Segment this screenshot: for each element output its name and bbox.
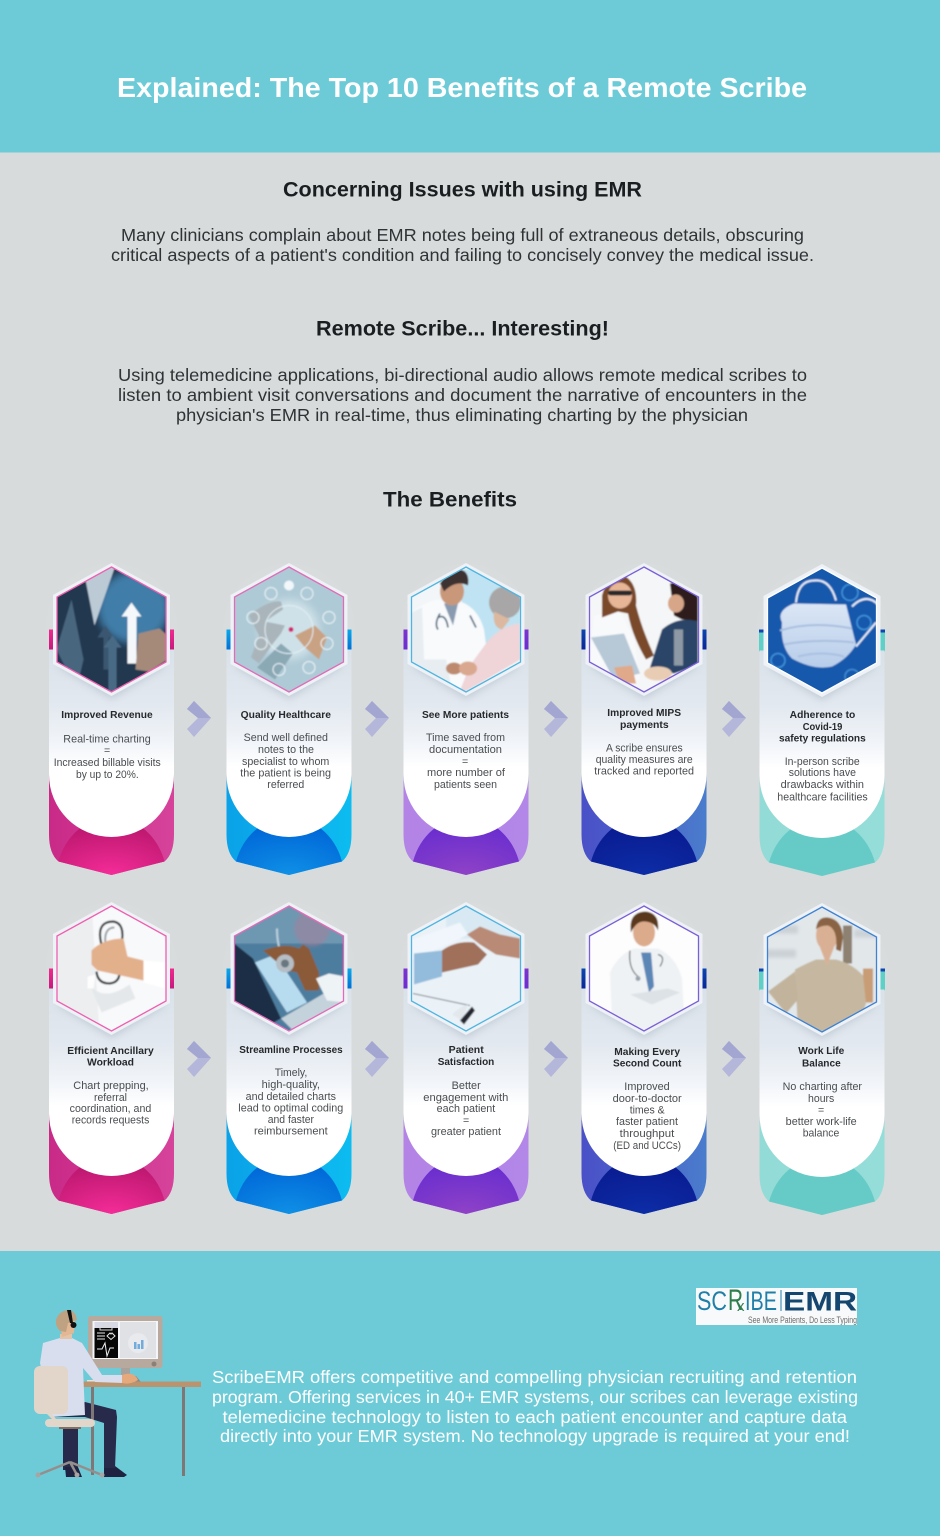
arrow <box>722 1041 746 1077</box>
card title: Streamline Processes <box>239 1045 343 1056</box>
card title: payments <box>620 720 669 731</box>
card body text: the patient is being <box>240 768 331 780</box>
icon: photo of male doctor <box>590 907 698 1012</box>
card: see more patients <box>400 560 532 875</box>
card body text: each patient <box>437 1103 495 1115</box>
card title: Making Every <box>614 1047 680 1058</box>
card body text: In-person scribe <box>785 756 860 768</box>
card title: Work Life <box>798 1046 845 1057</box>
monitor <box>88 1316 162 1382</box>
icon: photo of stethoscope and tablet <box>235 906 343 1030</box>
card: quality healthcare <box>223 560 355 875</box>
logo: ScribeEMR: IBE <box>745 1286 777 1316</box>
card body text: times & <box>630 1104 665 1116</box>
card title <box>438 1045 494 1068</box>
card body text: = <box>463 1115 469 1127</box>
card title: Efficient Ancillary <box>67 1046 154 1057</box>
card body text: quality measures are <box>596 754 693 766</box>
logo: ScribeEMR: See More Patients, Do Less Typing <box>748 1315 857 1325</box>
icon: photo of doctor with patient <box>422 569 520 691</box>
card title: See More patients <box>422 710 509 721</box>
card title <box>607 708 681 731</box>
card body text: lead to optimal coding <box>238 1102 343 1114</box>
card body text: more number of <box>427 767 505 779</box>
card body text <box>70 1080 151 1126</box>
card body text: hours <box>808 1093 834 1105</box>
card body text: engagement with <box>423 1092 508 1104</box>
arrow <box>544 701 568 737</box>
logo: ScribeEMR: x <box>737 1298 745 1315</box>
card title: Improved MIPS <box>607 708 681 719</box>
footer text block: telemedicine technology to listen to each patient encounter and capture data <box>222 1407 847 1427</box>
heading: remote scribe: Remote Scribe... Interesting! <box>316 318 609 340</box>
card title: Workload <box>87 1058 134 1068</box>
card: streamline processes <box>223 898 355 1214</box>
desk <box>83 1380 201 1476</box>
card body text <box>777 756 868 804</box>
card body text: Time saved from <box>426 732 505 744</box>
card body text: Better <box>452 1080 481 1092</box>
card title: Second Count <box>613 1058 682 1070</box>
card title: Patient <box>449 1045 484 1056</box>
icon: photo of face mask <box>768 568 876 692</box>
card body text: greater patient <box>431 1126 501 1138</box>
card title: safety regulations <box>779 734 866 744</box>
card body text: and detailed charts <box>246 1091 336 1103</box>
card body text: Real-time charting <box>63 734 151 746</box>
card body text: door-to-doctor <box>613 1093 682 1105</box>
logo: ScribeEMR <box>696 1284 857 1325</box>
card title <box>67 1046 154 1068</box>
card body text: = <box>818 1104 824 1116</box>
card body text: referred <box>267 779 304 791</box>
card: work life balance <box>756 900 888 1215</box>
icon: photo of meditating woman <box>768 908 876 1031</box>
card title: Covid-19 <box>803 722 843 733</box>
card body text: Chart prepping, <box>73 1080 149 1092</box>
chair stem <box>68 1428 72 1464</box>
title: Explained: The Top 10 Benefits of a Remote Scribe <box>117 72 807 103</box>
text block: concerning issues: Many clinicians complain about EMR notes being full of extraneous details, obscuring <box>121 225 804 245</box>
card: efficient ancillary workload <box>46 898 178 1214</box>
text block: remote scribe: physician's EMR in real-time, thus eliminating charting by the physician <box>176 405 748 425</box>
arrow <box>187 1041 211 1077</box>
card body text: notes to the <box>258 744 314 756</box>
text block: remote scribe: listen to ambient visit conversations and document the narrative of encounters in the <box>118 385 807 405</box>
card body text <box>240 732 331 791</box>
card body text: specialist to whom <box>242 756 329 768</box>
card title: Quality Healthcare <box>241 710 331 721</box>
card body text: referral <box>94 1092 127 1104</box>
desk leg <box>91 1387 94 1475</box>
card body text: drawbacks within <box>781 779 864 791</box>
card body text: Timely, <box>275 1067 307 1079</box>
card body text: high-quality, <box>262 1079 320 1091</box>
card body text: tracked and reported <box>594 766 694 778</box>
card body text: and faster <box>268 1114 314 1126</box>
card: making every second count <box>578 898 710 1214</box>
card: improved revenue <box>46 560 178 875</box>
card body text <box>426 732 505 791</box>
card: improved MIPS payments <box>578 560 710 875</box>
card body text: A scribe ensures <box>606 742 683 754</box>
card title: Balance <box>802 1058 841 1070</box>
footer text block <box>212 1367 858 1446</box>
card body text: No charting after <box>783 1081 862 1093</box>
card body text: better work-life <box>786 1116 857 1128</box>
text block: remote scribe: Using telemedicine applications, bi-directional audio allows remote medical scribes to <box>118 365 807 385</box>
illustration: scribe at desk <box>34 1310 201 1478</box>
card body text: = <box>462 756 468 768</box>
card body text: healthcare facilities <box>777 792 868 804</box>
person <box>40 1310 138 1477</box>
card body text: faster patient <box>616 1116 678 1128</box>
card body text: solutions have <box>789 767 856 779</box>
card body text: records requests <box>72 1114 149 1126</box>
card: adherence to covid-19 safety regulations <box>756 560 888 876</box>
card body text <box>594 742 694 778</box>
text block: concerning issues: critical aspects of a patient's condition and failing to concisely convey the medical issue. <box>111 245 814 265</box>
text block: remote scribe <box>118 365 807 425</box>
footer text block: ScribeEMR offers competitive and compelling physician recruiting and retention <box>212 1367 857 1387</box>
chair <box>34 1366 104 1478</box>
arrow <box>187 701 211 737</box>
card title: Adherence to <box>790 710 855 721</box>
card body text: coordination, and <box>70 1103 151 1115</box>
card body text: reimbursement <box>254 1126 328 1138</box>
card title <box>779 710 866 744</box>
heading: the benefits: The Benefits <box>383 488 517 512</box>
footer text block: program. Offering services in 40+ EMR systems, our scribes can leverage existing <box>212 1387 858 1407</box>
card body text: balance <box>803 1128 839 1140</box>
card body text <box>783 1081 862 1140</box>
card body text: throughput <box>620 1128 674 1140</box>
text block: concerning issues <box>111 225 814 265</box>
card title <box>613 1047 682 1070</box>
icon: photo of clasped hands <box>412 907 520 1026</box>
heading: concerning issues: Concerning Issues with using EMR <box>283 178 642 202</box>
card body text: = <box>104 745 110 757</box>
icon: photo of digital health hands <box>235 568 343 692</box>
card body text: documentation <box>429 744 502 756</box>
arrow <box>365 1041 389 1077</box>
arrow <box>722 701 746 737</box>
logo: ScribeEMR: SC <box>697 1286 727 1316</box>
footer text block: directly into your EMR system. No technology upgrade is required at your end! <box>220 1426 850 1446</box>
card body text <box>423 1080 508 1138</box>
footer band <box>0 1251 940 1536</box>
card body text: by up to 20%. <box>76 769 139 781</box>
card body text <box>54 734 161 781</box>
card body text <box>613 1081 682 1152</box>
logo: ScribeEMR: R <box>728 1284 743 1317</box>
arrow <box>544 1041 568 1077</box>
card body text: (ED and UCCs) <box>613 1140 681 1152</box>
card body text: Send well defined <box>244 732 328 744</box>
card body text: patients seen <box>434 779 497 791</box>
card body text: Increased billable visits <box>54 757 161 769</box>
icon: photo of hand with stethoscope <box>88 907 166 1030</box>
card title <box>798 1046 845 1070</box>
card: patient satisfaction <box>400 898 532 1214</box>
logo: ScribeEMR: EMR <box>783 1286 857 1316</box>
card title: Improved Revenue <box>61 710 153 721</box>
arrow <box>365 701 389 737</box>
card body text: Improved <box>624 1081 670 1093</box>
icon: photo of two women with tablet <box>590 577 698 684</box>
card body text <box>238 1067 343 1138</box>
card title: Satisfaction <box>438 1057 494 1068</box>
header band <box>0 0 940 152</box>
icon: photo of rising arrow <box>58 568 166 692</box>
